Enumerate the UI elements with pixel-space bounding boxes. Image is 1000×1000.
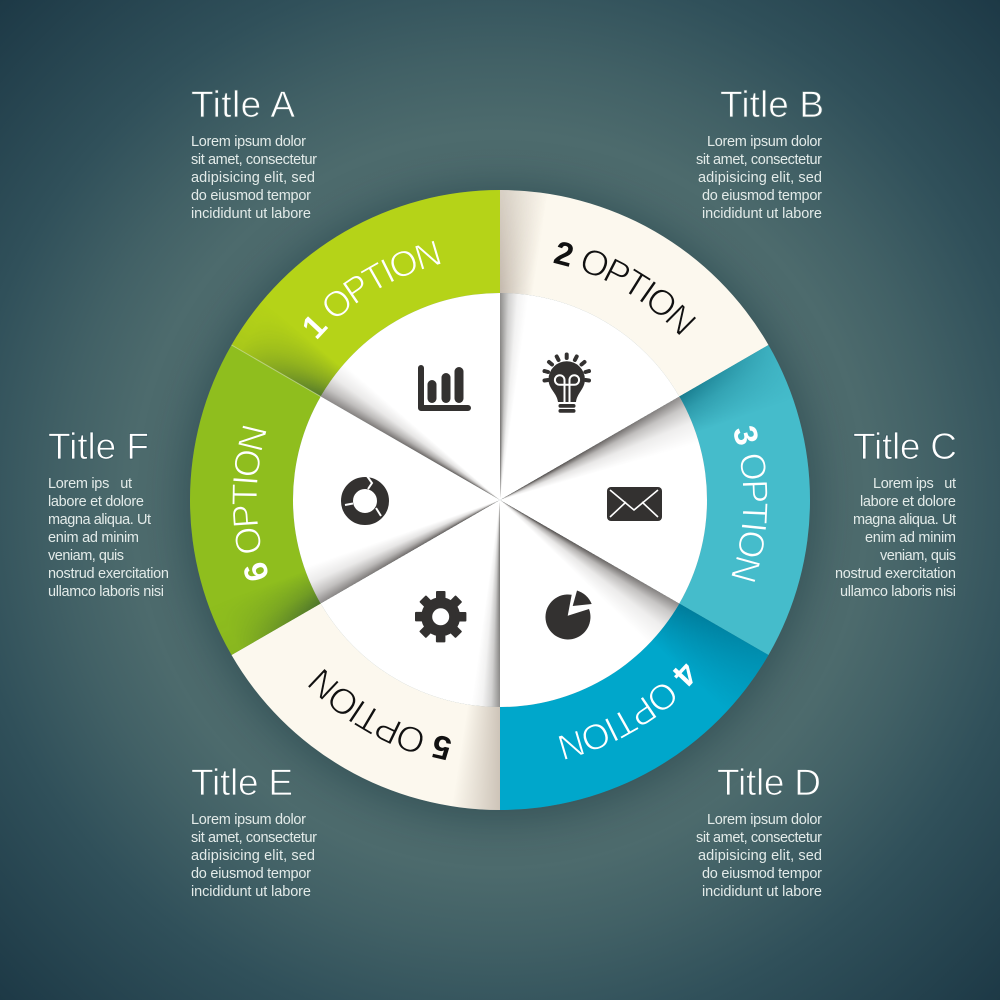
body A: sit amet, consectetur xyxy=(191,152,317,168)
body F: magna aliqua. Ut xyxy=(48,512,151,528)
body D: Lorem ipsum dolor xyxy=(707,812,822,828)
body B: adipisicing elit, sed xyxy=(698,170,822,186)
body B: sit amet, consectetur xyxy=(696,152,822,168)
body B: do eiusmod tempor xyxy=(702,188,822,204)
body D xyxy=(696,812,822,900)
body F: enim ad minim xyxy=(48,530,139,546)
inner wedge 5 xyxy=(320,500,500,707)
inner wedge 2 xyxy=(500,293,680,500)
body E: sit amet, consectetur xyxy=(191,830,317,846)
body D: sit amet, consectetur xyxy=(696,830,822,846)
curved label 5 OPTION: 5 OPTION xyxy=(308,669,451,760)
body B xyxy=(696,134,822,222)
body A: adipisicing elit, sed xyxy=(191,170,315,186)
icon: cycle arrows xyxy=(345,476,383,519)
body C: ullamco laboris nisi xyxy=(840,584,956,600)
icon: light bulb xyxy=(544,354,589,413)
ring segment 6 xyxy=(190,345,321,655)
body C: veniam, quis xyxy=(880,548,956,564)
heading D: Title D xyxy=(717,762,821,803)
body F: veniam, quis xyxy=(48,548,124,564)
ring segment 2 xyxy=(500,190,768,396)
curved label 1 OPTION: 1 OPTION xyxy=(304,240,440,340)
inner wedge 3 xyxy=(500,396,707,604)
panel: sector 4 blue xyxy=(500,500,768,810)
body E: adipisicing elit, sed xyxy=(191,848,315,864)
icon: envelope xyxy=(607,487,662,521)
body B: incididunt ut labore xyxy=(702,206,822,222)
body A: incididunt ut labore xyxy=(191,206,311,222)
inner wedge 1 xyxy=(320,293,500,500)
panel: sector 3 teal xyxy=(500,345,810,655)
curved label 3 OPTION: 3 OPTION xyxy=(732,426,768,582)
icon: bar chart xyxy=(421,367,468,408)
heading C: Title C xyxy=(853,426,957,467)
body E xyxy=(191,812,317,900)
curved label 2 OPTION: 2 OPTION xyxy=(553,242,696,335)
ring segment 4 xyxy=(500,604,768,810)
body C: magna aliqua. Ut xyxy=(853,512,956,528)
body F: labore et dolore xyxy=(48,494,144,510)
body F: ullamco laboris nisi xyxy=(48,584,164,600)
icon: gear xyxy=(415,591,466,642)
body C: enim ad minim xyxy=(865,530,956,546)
body C: labore et dolore xyxy=(860,494,956,510)
heading B: Title B xyxy=(720,84,824,125)
body C xyxy=(835,476,956,600)
body D: incididunt ut labore xyxy=(702,884,822,900)
body F: Lorem ips ut xyxy=(48,476,132,492)
inner wedge 4 xyxy=(500,500,680,707)
block: Title B xyxy=(696,84,824,222)
curved label 4 OPTION: 4 OPTION xyxy=(558,663,693,760)
body D: do eiusmod tempor xyxy=(702,866,822,882)
panel: sector 1 green xyxy=(232,190,500,500)
body C: nostrud exercitation xyxy=(835,566,956,582)
block: Title F xyxy=(48,426,169,600)
body E: Lorem ipsum dolor xyxy=(191,812,306,828)
body F: nostrud exercitation xyxy=(48,566,169,582)
block: Title E xyxy=(191,762,317,900)
body C: Lorem ips ut xyxy=(873,476,956,492)
block: Title A xyxy=(191,84,317,222)
panel: sector 2 cream xyxy=(500,190,768,500)
body B: Lorem ipsum dolor xyxy=(707,134,822,150)
ring segment 5 xyxy=(232,604,500,810)
body E: do eiusmod tempor xyxy=(191,866,311,882)
panel: sector 5 cream xyxy=(232,500,500,810)
heading A: Title A xyxy=(191,84,295,125)
panel: sector 6 green xyxy=(190,345,500,655)
body A: Lorem ipsum dolor xyxy=(191,134,306,150)
inner wedge 6 xyxy=(293,396,500,604)
icon: pie chart xyxy=(545,590,592,639)
curved label 6 OPTION: 6 OPTION xyxy=(232,426,268,580)
body A: do eiusmod tempor xyxy=(191,188,311,204)
body E: incididunt ut labore xyxy=(191,884,311,900)
ring segment 1 xyxy=(232,190,500,396)
body F xyxy=(48,476,169,600)
heading F: Title F xyxy=(48,426,149,467)
block: Title C xyxy=(835,426,957,600)
body D: adipisicing elit, sed xyxy=(698,848,822,864)
ring segment 3 xyxy=(679,345,810,655)
block: Title D xyxy=(696,762,822,900)
body A xyxy=(191,134,317,222)
wheel xyxy=(190,190,810,810)
heading E: Title E xyxy=(191,762,293,803)
